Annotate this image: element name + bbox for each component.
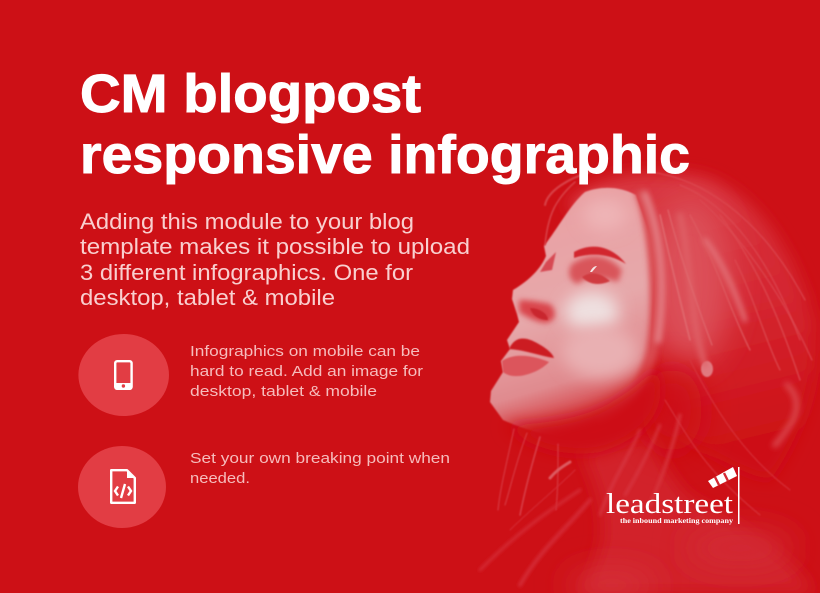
intro paragraph: Adding this module to your blog <box>80 209 414 234</box>
eyebrow <box>574 247 626 264</box>
logo: leadstreet: leadstreet <box>606 488 733 520</box>
intro paragraph: template makes it possible to upload <box>80 234 470 259</box>
hair mass <box>565 173 816 480</box>
cheek highlight <box>565 292 619 332</box>
title: responsive infographic <box>80 125 690 185</box>
logo: leadstreet <box>606 467 740 525</box>
text: mobile readability: hard to read. Add an image for <box>190 363 423 380</box>
ear <box>701 361 713 377</box>
title: CM blogpost <box>80 64 421 124</box>
neck and shoulder <box>567 435 812 593</box>
face <box>490 188 713 453</box>
logo: leadstreet: the inbound marketing company <box>620 517 734 525</box>
text: breaking point <box>190 450 450 487</box>
icon: windsock <box>708 467 740 524</box>
hair shadow behind jaw <box>642 368 702 452</box>
text: mobile readability <box>190 343 423 400</box>
text: mobile readability: Infographics on mobile can be <box>190 343 420 360</box>
eye socket shadows <box>569 256 622 284</box>
hair strands <box>480 172 812 585</box>
jaw shadow <box>505 365 660 453</box>
nose shadow <box>519 300 555 323</box>
text: breaking point: Set your own breaking point when <box>190 450 450 467</box>
icon: code file <box>78 446 166 528</box>
text: mobile readability: desktop, tablet & mobile <box>190 383 377 400</box>
icon: mobile phone <box>78 334 169 416</box>
title <box>80 64 690 185</box>
intro paragraph <box>80 209 470 310</box>
lips <box>509 339 554 358</box>
eye <box>582 273 610 284</box>
photo: woman looking upward <box>480 172 816 593</box>
text: breaking point: needed. <box>190 470 250 487</box>
intro paragraph: 3 different infographics. One for <box>80 260 413 285</box>
intro paragraph: desktop, tablet & mobile <box>80 285 335 310</box>
face-to-hair transition <box>600 190 656 425</box>
